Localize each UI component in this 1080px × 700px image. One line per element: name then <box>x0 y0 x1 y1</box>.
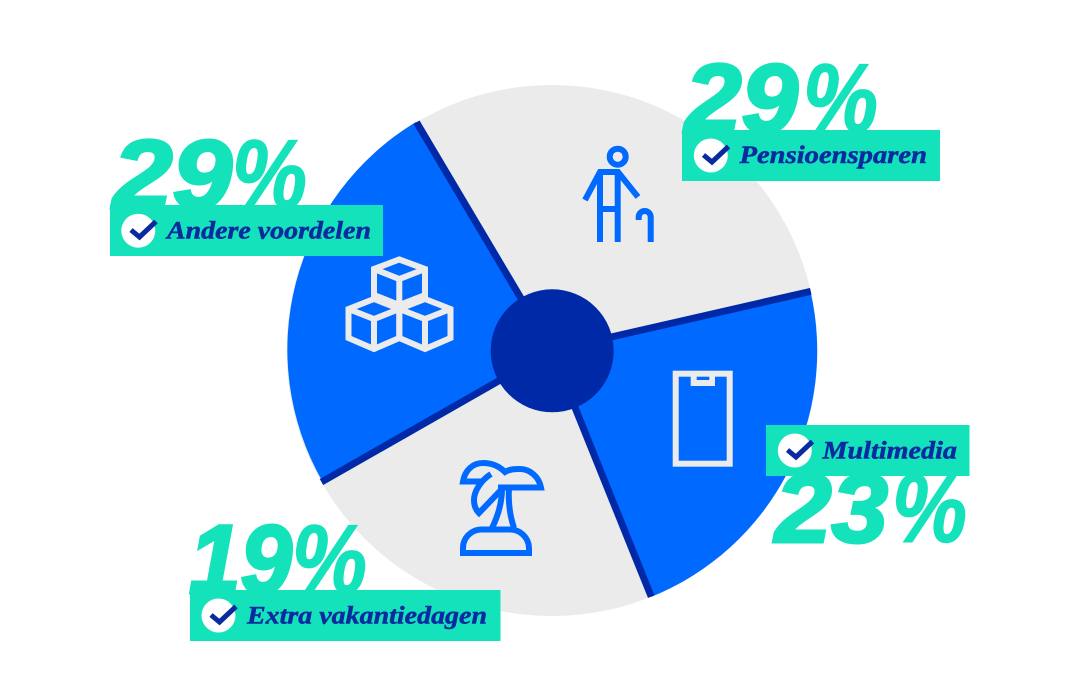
pie chart <box>286 85 818 616</box>
percentage digits: 29 <box>111 120 232 229</box>
percent sign: % <box>803 44 878 153</box>
percentage digits: 23 <box>773 454 888 563</box>
segment: multimedia <box>552 292 817 597</box>
icon: check <box>778 434 812 468</box>
label text: Pensioensparen <box>738 142 927 169</box>
icon: smartphone <box>676 373 730 464</box>
label bar <box>110 205 383 256</box>
label text: Extra vakantiedagen <box>246 602 487 630</box>
icon: check <box>694 138 728 172</box>
icon: palm tree <box>463 463 541 553</box>
percent sign: % <box>292 505 367 614</box>
pie base: grey segments <box>286 85 818 616</box>
icon: cubes <box>348 260 450 349</box>
percent sign: % <box>892 454 967 563</box>
percent sign: % <box>232 120 307 229</box>
stat: pensioensparen <box>682 44 940 181</box>
percentage digits: 19 <box>189 505 292 614</box>
segment: andere voordelen <box>287 122 552 482</box>
icon: check <box>121 214 156 248</box>
label text: Multimedia <box>821 438 957 464</box>
stat: extra vakantiedagen <box>189 505 500 641</box>
stat: andere voordelen <box>110 120 383 256</box>
label bar <box>766 425 970 476</box>
stat: multimedia <box>766 425 970 563</box>
icon: check <box>202 598 236 632</box>
percentage digits: 29 <box>683 44 798 153</box>
icon: pensioner <box>585 149 651 242</box>
label text: Andere voordelen <box>165 218 371 244</box>
label bar <box>190 590 500 641</box>
label bar <box>682 130 940 181</box>
pie centre <box>491 289 614 412</box>
